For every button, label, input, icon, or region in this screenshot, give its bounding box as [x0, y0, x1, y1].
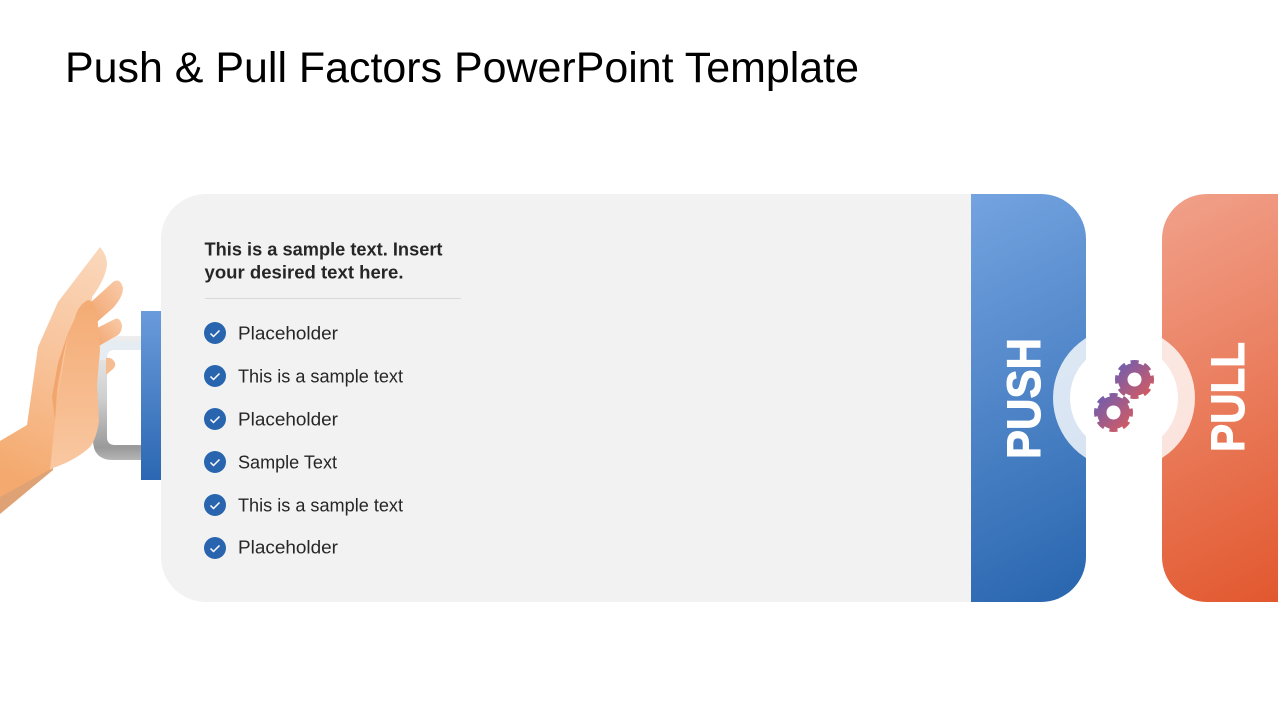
- checklist: [204, 322, 404, 559]
- text block: heading: [204, 240, 443, 282]
- palm: [50, 300, 100, 470]
- list item 5: This is a sample text: [238, 494, 404, 516]
- panel: push tab: [971, 194, 1086, 602]
- panel: pull tab: [1162, 194, 1278, 602]
- back of hand, index finger and forearm: [0, 247, 107, 497]
- label: pull: PULL: [1201, 342, 1254, 452]
- ring finger: [97, 319, 122, 347]
- lower arm shadow: [0, 465, 53, 514]
- middle finger: [90, 280, 123, 322]
- list item 3: Placeholder: [238, 408, 338, 430]
- list item 6: Placeholder: [238, 536, 338, 558]
- label: push: PUSH: [997, 338, 1050, 459]
- icon: door handle: [93, 336, 141, 460]
- icon: gears: [1096, 362, 1152, 430]
- title: Push & Pull Factors PowerPoint Template: [65, 44, 859, 92]
- list item 2: This is a sample text: [238, 366, 404, 386]
- palm crease: [52, 333, 68, 420]
- back finger: [106, 358, 115, 375]
- list item 6: [204, 536, 338, 559]
- panel: content card: [161, 194, 1000, 602]
- icon: hand pushing: [0, 247, 123, 514]
- list item 4: [204, 451, 338, 473]
- icon: blue handle bar: [141, 311, 161, 480]
- text block: heading: your desired text here.: [204, 262, 404, 282]
- icon: lower gear: [1096, 395, 1131, 430]
- icon: upper gear: [1117, 362, 1152, 397]
- ring behind gears: [1053, 338, 1195, 458]
- infographic slide: [0, 51, 1278, 602]
- list item 4: Sample Text: [238, 452, 338, 472]
- list item 1: Placeholder: [238, 322, 338, 344]
- text block: heading: This is a sample text. Insert: [204, 240, 443, 260]
